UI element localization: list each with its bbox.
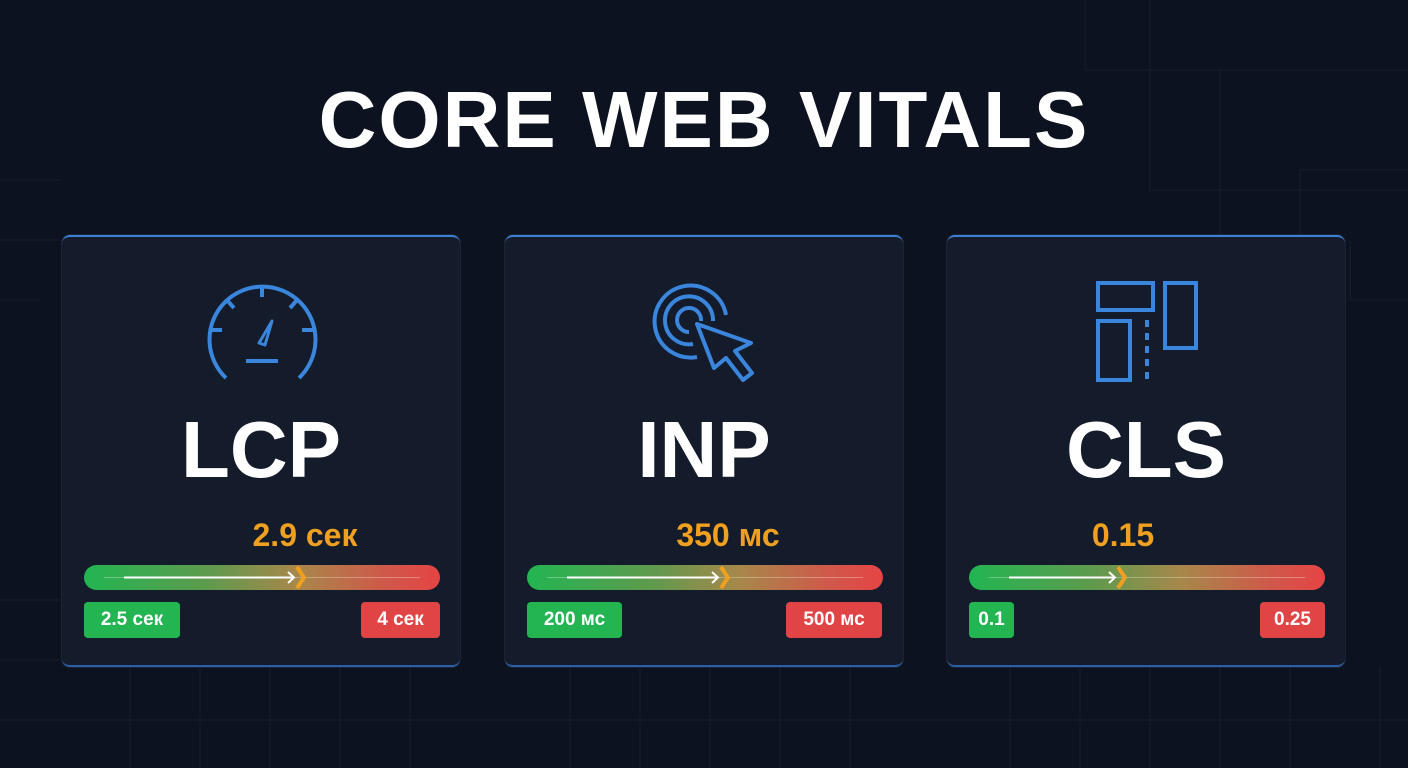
metric name: LCP (181, 405, 341, 494)
badge good (527, 602, 622, 638)
current value: 2.9 сек (252, 517, 357, 553)
metric name: CLS (1066, 405, 1226, 494)
badge poor (1260, 602, 1325, 638)
metric name: INP (637, 405, 771, 494)
badge poor (361, 602, 440, 638)
badge poor: 500 мс (803, 609, 865, 630)
badge good (969, 602, 1014, 638)
panel: INP (505, 235, 903, 667)
gradient bar (527, 565, 883, 590)
icon: layout shift (1096, 281, 1198, 382)
badge poor (786, 602, 882, 638)
panel: CLS (947, 235, 1345, 667)
current value: 350 мс (676, 517, 780, 553)
badge good (84, 602, 180, 638)
badge good: 0.1 (978, 609, 1005, 630)
panel: LCP (62, 235, 460, 667)
badge good: 2.5 сек (101, 609, 163, 630)
icon: click cursor (652, 284, 754, 382)
badge poor: 4 сек (377, 609, 424, 630)
icon: speedometer (208, 284, 318, 380)
current value: 0.15 (1092, 517, 1154, 553)
gradient bar (84, 565, 440, 590)
badge good: 200 мс (544, 609, 605, 630)
badge poor: 0.25 (1274, 609, 1311, 630)
gradient bar (969, 565, 1325, 590)
title: CORE WEB VITALS (319, 75, 1089, 164)
